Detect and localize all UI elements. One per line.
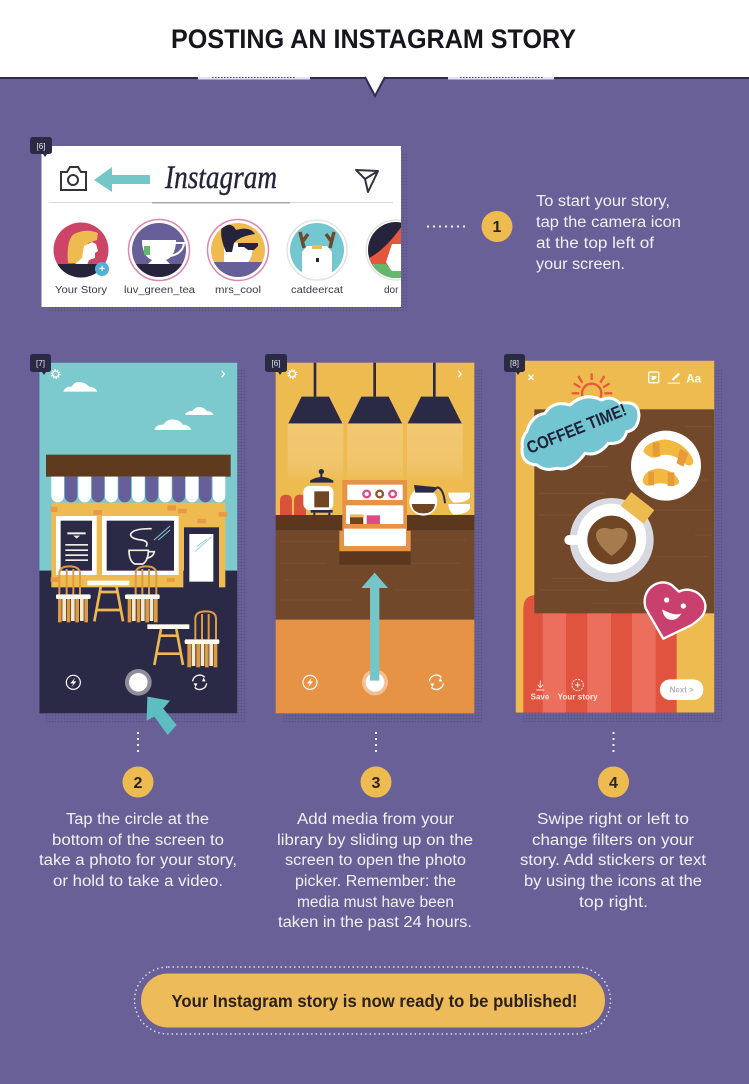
text: step 3: taken in the past 24 hours. bbox=[278, 914, 472, 931]
avatar labels: luv_green_tea bbox=[124, 285, 195, 296]
text: step 4: story. Add stickers or text bbox=[520, 852, 707, 869]
sticker: coffee time cloud: COFFEE TIME! bbox=[524, 399, 629, 458]
avatar: catdeercat bbox=[287, 220, 347, 280]
text: step 4: change filters on your bbox=[532, 832, 694, 849]
callout: ready to publish: Your Instagram story is now ready to be published! bbox=[172, 991, 578, 1011]
image credit tag: 6: [6] bbox=[272, 359, 280, 368]
step badge 2: 2 bbox=[134, 775, 143, 792]
save and share controls bbox=[531, 679, 703, 702]
save and share controls: Next > bbox=[670, 686, 694, 695]
connector dots step 2 bbox=[137, 732, 139, 756]
arrow: tap capture button bbox=[147, 697, 177, 735]
avatar labels: catdeercat bbox=[291, 285, 343, 296]
icon: send bbox=[356, 170, 378, 192]
step badge 3: 3 bbox=[372, 775, 381, 792]
avatar: luv_green_tea bbox=[128, 220, 190, 280]
text: step 4: by using the icons at the bbox=[524, 873, 702, 890]
edit controls bbox=[528, 372, 702, 385]
awning bbox=[46, 455, 231, 502]
title: POSTING AN INSTAGRAM STORY bbox=[171, 24, 576, 54]
avatar: fifth user bbox=[365, 219, 401, 281]
avatar: Your Story bbox=[53, 222, 109, 278]
image credit tag: 7 bbox=[30, 354, 51, 375]
sticker: smiling heart bbox=[645, 582, 705, 639]
text: step 1: To start your story, bbox=[536, 193, 670, 210]
counter bbox=[276, 515, 474, 713]
avatar: Your Story: + bbox=[99, 264, 105, 275]
text: step 4: Swipe right or left to bbox=[537, 811, 689, 828]
panel: Instagram home screen bbox=[42, 146, 426, 307]
text: step 1 bbox=[536, 193, 681, 273]
step badge 3 bbox=[360, 766, 392, 798]
text: step 2: Tap the circle at the bbox=[66, 811, 209, 828]
panel: cafe exterior phone screen bbox=[39, 363, 237, 735]
tablecloth bbox=[523, 595, 677, 713]
text: step 1: at the top left of bbox=[536, 235, 655, 252]
text: step 3: picker. Remember: the bbox=[295, 873, 456, 890]
step badge 4: 4 bbox=[609, 775, 618, 792]
image credit tag: 6 bbox=[265, 354, 287, 375]
text: step 3 bbox=[277, 811, 473, 931]
callout: ready to publish bbox=[134, 967, 610, 1034]
text: step 3: Add media from your bbox=[297, 811, 454, 828]
avatar: mrs_cool bbox=[208, 220, 268, 280]
save and share controls: Your story bbox=[558, 693, 598, 702]
image credit tag: 8 bbox=[504, 354, 525, 375]
step badge 1 bbox=[482, 211, 512, 242]
pastry display case bbox=[339, 480, 411, 565]
step badge 2 bbox=[122, 766, 154, 798]
arrow: pointing to camera bbox=[94, 167, 150, 192]
text: step 2: take a photo for your story, bbox=[39, 852, 237, 869]
coffee cup bbox=[564, 492, 654, 582]
clouds bbox=[63, 382, 214, 430]
text: step 4: top right. bbox=[579, 894, 648, 911]
chairs and tables bbox=[56, 566, 219, 667]
save and share controls: Save bbox=[531, 693, 550, 702]
text: step 1: tap the camera icon bbox=[536, 214, 681, 231]
avatar labels: dor bbox=[384, 285, 399, 296]
french press bbox=[303, 469, 333, 515]
hanging lamps bbox=[288, 363, 463, 481]
avatar labels: mrs_cool bbox=[215, 285, 261, 296]
step badge 4 bbox=[598, 766, 629, 798]
text: step 4 bbox=[520, 811, 707, 911]
text: step 2: or hold to take a video. bbox=[53, 873, 223, 890]
sun sticker bbox=[572, 373, 612, 398]
avatars row bbox=[53, 220, 426, 296]
panel: story editing phone screen bbox=[516, 361, 714, 713]
connector dots bbox=[427, 226, 465, 228]
camera controls bbox=[288, 370, 461, 695]
Instagram wordmark: Instagram bbox=[164, 160, 277, 196]
plate of croissants bbox=[631, 431, 701, 501]
edit controls: Aa bbox=[686, 372, 702, 385]
icon: camera bbox=[61, 167, 86, 190]
image credit tag: 6: [6] bbox=[37, 142, 45, 151]
image credit tag: 7: [7] bbox=[36, 359, 45, 368]
image credit tag: 8: [8] bbox=[510, 359, 519, 368]
text: step 2 bbox=[39, 811, 237, 890]
text: step 3: screen to open the photo bbox=[285, 852, 466, 869]
text: step 1: your screen. bbox=[536, 256, 625, 273]
connector dots step 3 bbox=[375, 732, 377, 756]
coffee pot and cups bbox=[409, 485, 470, 516]
text: step 3: media must have been bbox=[297, 894, 454, 911]
avatar labels bbox=[55, 285, 399, 296]
step badge 1: 1 bbox=[493, 219, 502, 236]
cafe building bbox=[51, 503, 227, 591]
arrow: slide up bbox=[361, 573, 388, 681]
text: step 3: library by sliding up on the bbox=[277, 832, 473, 849]
table bbox=[534, 409, 714, 613]
text: step 2: bottom of the screen to bbox=[52, 832, 224, 849]
canisters bbox=[280, 495, 306, 515]
connector dots step 4 bbox=[612, 732, 614, 756]
image credit tag: 6 bbox=[30, 137, 52, 157]
camera controls bbox=[51, 370, 224, 696]
panel: cafe interior phone screen bbox=[276, 363, 474, 713]
header band bbox=[0, 0, 749, 96]
avatar labels: Your Story bbox=[55, 285, 107, 296]
